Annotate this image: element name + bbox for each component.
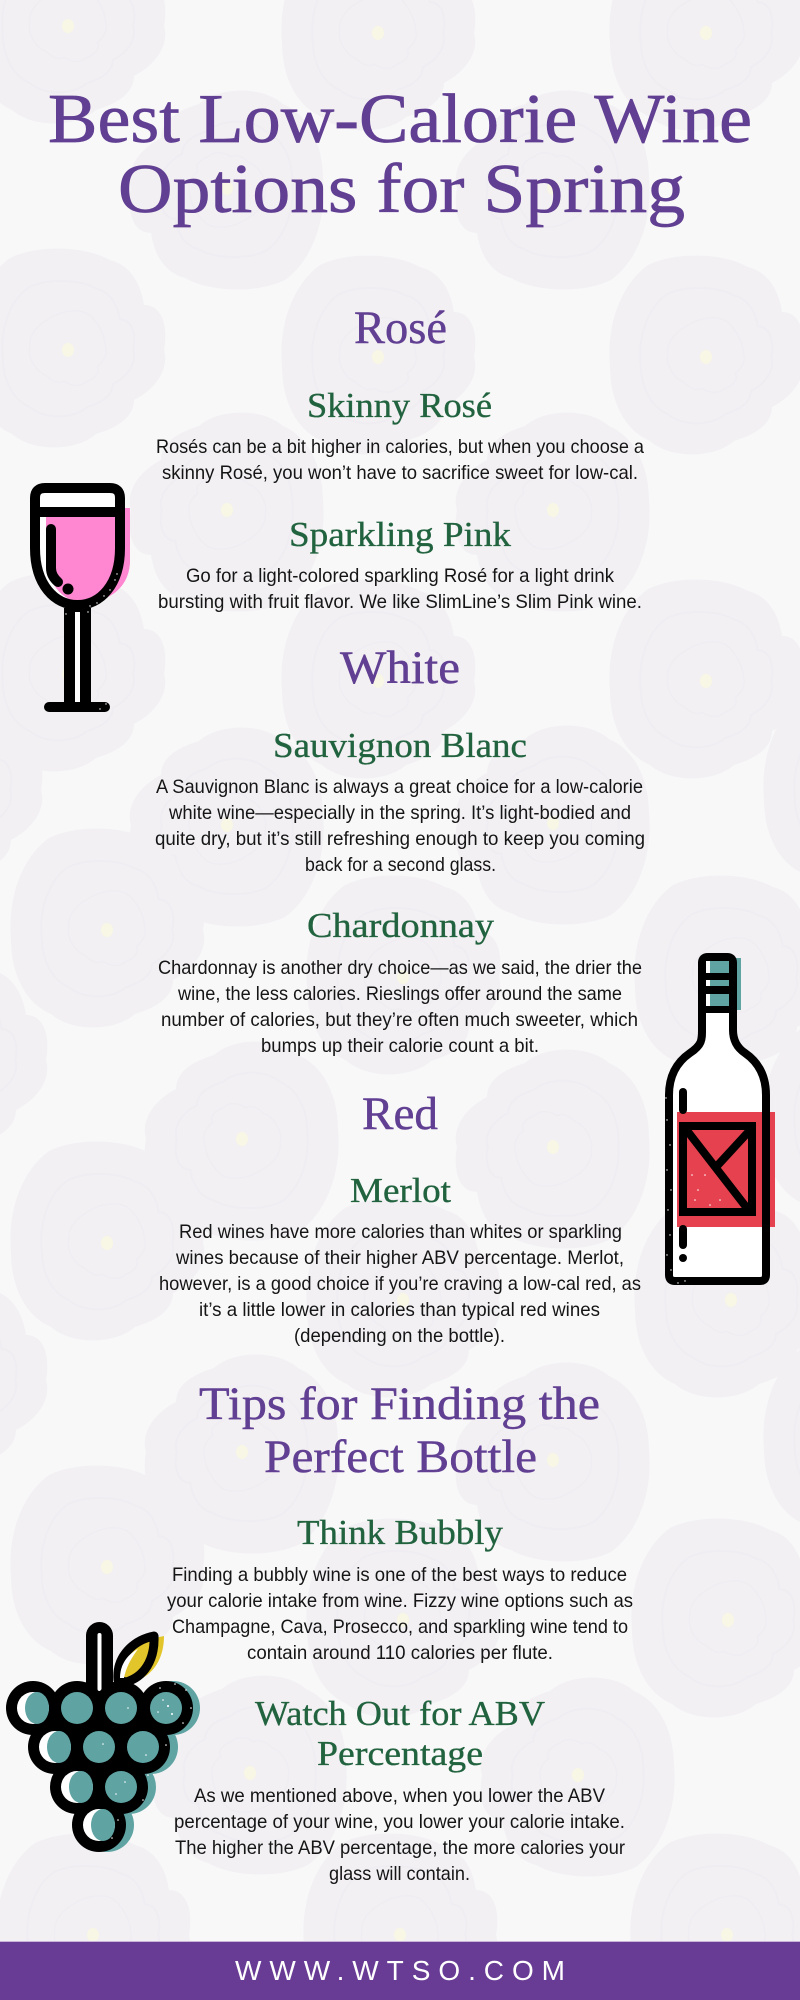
subheading: Watch Out for ABV Percentage: Watch Out for ABV <box>255 1694 545 1733</box>
subheading: Think Bubbly: Think Bubbly <box>297 1513 504 1552</box>
subheading: Sauvignon Blanc: Sauvignon Blanc <box>273 726 527 765</box>
subheading: Watch Out for ABV Percentage <box>255 1694 545 1773</box>
text: Watch Out for ABV <box>174 1785 625 1885</box>
text: Merlot: (depending on the bottle). <box>294 1325 505 1347</box>
text: Watch Out for ABV: percentage of your wine, you lower your calorie intake. <box>174 1811 625 1833</box>
subheading: Merlot: Merlot <box>350 1171 451 1210</box>
text: Sauvignon Blanc: back for a second glass. <box>305 854 496 876</box>
heading: Rosé: Rosé <box>354 302 447 354</box>
text: Merlot <box>159 1221 641 1347</box>
text: Merlot: it’s a little lower in calories than typical red wines <box>199 1299 600 1321</box>
text: Chardonnay: bumps up their calorie count a bit. <box>261 1035 539 1057</box>
text: Sauvignon Blanc: white wine—especially in the spring. It’s light-bodied and <box>168 802 631 824</box>
text: Sauvignon Blanc <box>155 776 645 876</box>
text: Sparkling Pink <box>158 565 642 613</box>
text: Merlot: Red wines have more calories than whites or sparkling <box>179 1221 622 1243</box>
subheading: Chardonnay: Chardonnay <box>307 906 495 945</box>
title: Best Low-Calorie Wine <box>48 81 752 158</box>
text: Skinny Rosé: skinny Rosé, you won’t have to sacrifice sweet for low-cal. <box>162 462 638 484</box>
text: Sauvignon Blanc: A Sauvignon Blanc is always a great choice for a low-calorie <box>156 776 643 798</box>
subheading: Sparkling Pink: Sparkling Pink <box>289 515 512 554</box>
text: Skinny Rosé: Rosés can be a bit higher in calories, but when you choose a <box>156 436 644 458</box>
footer bar <box>0 1941 800 2000</box>
heading: tips <box>199 1378 600 1483</box>
text: Watch Out for ABV: The higher the ABV percentage, the more calories your <box>175 1837 625 1859</box>
subheading: Watch Out for ABV Percentage: Percentage <box>317 1734 483 1773</box>
text: Think Bubbly: Champagne, Cava, Prosecco, and sparkling wine tend to <box>172 1616 628 1638</box>
section: tips <box>167 1378 633 1885</box>
text: Think Bubbly: Finding a bubbly wine is one of the best ways to reduce <box>172 1564 627 1586</box>
section: Red <box>159 1088 641 1347</box>
heading: Red: Red <box>362 1088 438 1140</box>
text: Skinny Rosé <box>156 436 644 484</box>
text: Watch Out for ABV: glass will contain. <box>329 1863 470 1885</box>
text: Think Bubbly: contain around 110 calories per flute. <box>247 1642 553 1664</box>
section: Rosé <box>156 302 644 613</box>
heading: tips: Perfect Bottle <box>264 1431 537 1483</box>
text: Watch Out for ABV: As we mentioned above, when you lower the ABV <box>194 1785 605 1807</box>
heading: White: White <box>340 642 460 694</box>
text: Sparkling Pink: Go for a light-colored sparkling Rosé for a light drink <box>186 565 614 587</box>
title: Options for Spring <box>118 151 685 228</box>
text: Chardonnay: number of calories, but they’re often much sweeter, which <box>161 1009 638 1031</box>
icon: wine glass <box>35 488 130 710</box>
icon: grapes <box>6 1622 200 1852</box>
subheading: Skinny Rosé: Skinny Rosé <box>307 386 492 425</box>
text: Chardonnay: Chardonnay is another dry choice—as we said, the drier the <box>158 957 642 979</box>
text: Sauvignon Blanc: quite dry, but it’s still refreshing enough to keep you coming <box>155 828 645 850</box>
text: Sparkling Pink: bursting with fruit flavor. We like SlimLine’s Slim Pink wine. <box>158 591 642 613</box>
section: White <box>155 642 645 1057</box>
text: Merlot: however, is a good choice if you’re craving a low-cal red, as <box>159 1273 641 1295</box>
heading: tips: Tips for Finding the <box>199 1378 600 1430</box>
text: Think Bubbly: your calorie intake from wine. Fizzy wine options such as <box>167 1590 633 1612</box>
text: Think Bubbly <box>167 1564 633 1664</box>
text: Chardonnay: wine, the less calories. Rieslings offer around the same <box>177 983 622 1005</box>
icon: wine bottle <box>665 957 775 1284</box>
title <box>48 81 752 228</box>
footer url: WWW.WTSO.COM <box>235 1955 565 1986</box>
text: Chardonnay <box>158 957 642 1057</box>
text: Merlot: wines because of their higher ABV percentage. Merlot, <box>175 1247 624 1269</box>
